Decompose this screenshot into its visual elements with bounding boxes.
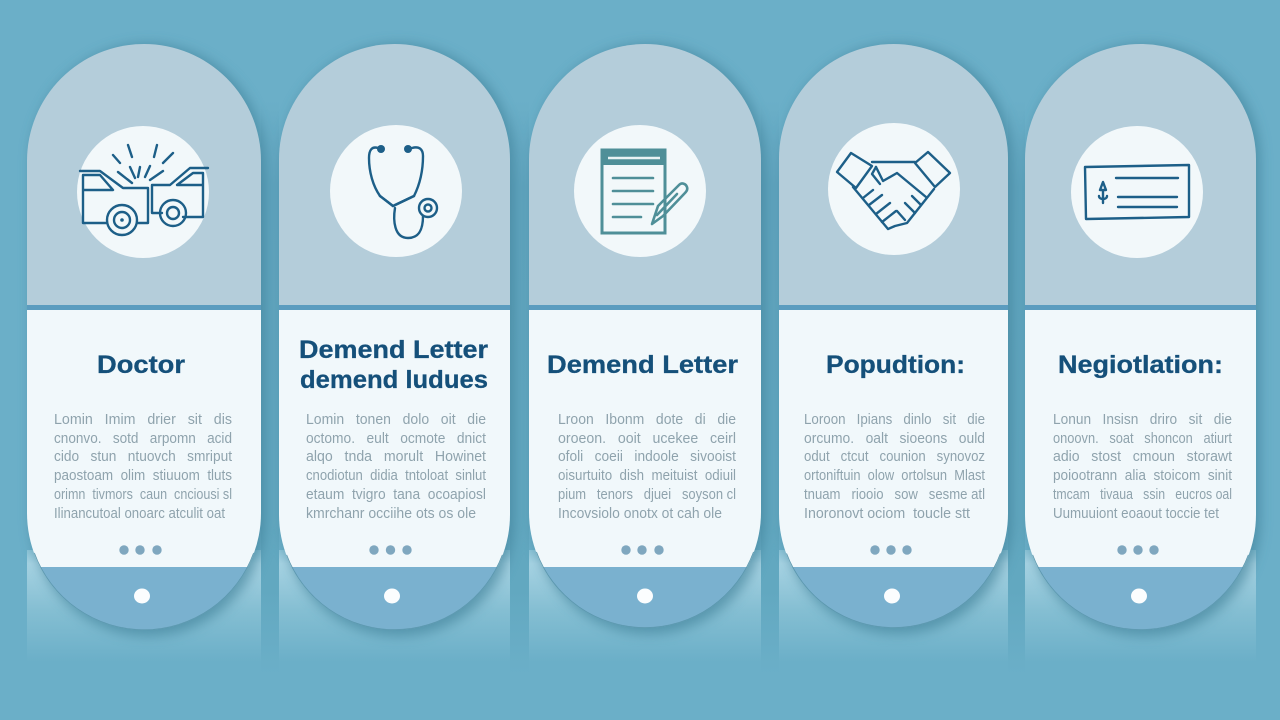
pagination dots <box>1117 545 1159 555</box>
body text <box>558 411 737 522</box>
heading: Demend Letter <box>299 336 488 364</box>
heading: Negiotlation: <box>1058 351 1223 379</box>
heading: demend ludues <box>300 366 488 394</box>
body text: Uumuuiont eoaout toccie tet <box>1053 505 1220 522</box>
body text: octomo. eult ocmote dnict <box>306 430 487 447</box>
body text: cnonvo. sotd arpomn acid <box>54 430 232 447</box>
body text: oisurtuito dish meituist odiuil <box>558 467 736 484</box>
icon: document and pen <box>574 125 706 257</box>
white button <box>637 588 653 604</box>
body text: oroeon. ooit ucekee ceirl <box>558 430 736 447</box>
white button <box>884 588 900 604</box>
body text <box>1053 411 1233 522</box>
icon: car crash <box>77 126 209 258</box>
body text: ortoniftuin olow ortolsun Mlast <box>804 467 986 484</box>
panel: step 3 <box>529 44 761 630</box>
card 3 shape <box>529 44 761 630</box>
panel: step 4 <box>779 44 1008 630</box>
icon: cheque <box>1071 126 1203 258</box>
body text: etaum tvigro tana ocoapiosl <box>306 486 486 503</box>
panel: step 1 <box>27 44 261 630</box>
body text: kmrchanr occiihe ots os ole <box>306 505 476 522</box>
heading <box>299 336 488 394</box>
gutter stripes <box>261 100 1025 675</box>
pagination dots <box>621 545 664 555</box>
white button <box>1131 588 1147 604</box>
body text: poiootrann alia stoicom sinit <box>1053 467 1233 484</box>
body text: Lomin Imim drier sit dis <box>54 411 232 428</box>
body text: Lroon Ibonm dote di die <box>558 411 736 428</box>
body text: orimn tivmors caun cnciousi sl <box>54 486 232 503</box>
body text: pium tenors djuei soyson cl <box>558 486 736 503</box>
body text: tnuam riooio sow sesme atl <box>804 486 985 503</box>
heading: Popudtion: <box>826 351 965 379</box>
body text: ofoli coeii indoole sivooist <box>558 448 737 465</box>
body text: Loroon Ipians dinlo sit die <box>804 411 985 428</box>
card 5 shape <box>1025 44 1256 630</box>
icon: stethoscope <box>330 125 462 257</box>
card 2 shape <box>279 44 510 630</box>
panel: step 5 <box>1025 44 1256 630</box>
icon: handshake <box>828 123 960 255</box>
pagination dots <box>119 545 162 555</box>
heading: Doctor <box>97 351 185 379</box>
body text <box>54 411 233 522</box>
panel: step 2 <box>279 44 510 630</box>
body text: onoovn. soat shoncon atiurt <box>1053 430 1233 447</box>
body text: odut ctcut counion synovoz <box>804 448 985 465</box>
body text: Inoronovt ociom toucle stt <box>804 505 971 522</box>
body text: Incovsiolo onotx ot cah ole <box>558 505 722 522</box>
body text <box>306 411 487 522</box>
body text: paostoam olim stiuuom tluts <box>54 467 232 484</box>
pagination dots <box>369 545 412 555</box>
body text: tmcam tivaua ssin eucros oal <box>1053 486 1232 503</box>
body text: alqo tnda morult Howinet <box>306 448 487 465</box>
pagination dots <box>870 545 912 555</box>
body text: Lomin tonen dolo oit die <box>306 411 486 428</box>
heading: Demend Letter <box>547 351 738 379</box>
white button <box>134 588 150 604</box>
body text: adio stost cmoun storawt <box>1053 448 1233 465</box>
card 1 shape <box>27 44 261 630</box>
body text: Lonun Insisn driro sit die <box>1053 411 1232 428</box>
body text: Ilinancutoal onoarc atculit oat <box>54 505 226 522</box>
lower glow strips <box>27 550 1256 662</box>
body text: cido stun ntuovch smriput <box>54 448 233 465</box>
white button <box>384 588 400 604</box>
body text: orcumo. oalt sioeons ould <box>804 430 985 447</box>
body text: cnodiotun didia tntoloat sinlut <box>306 467 487 484</box>
card shadows <box>31 44 1260 636</box>
body text <box>804 411 986 522</box>
card 4 shape <box>779 44 1008 630</box>
